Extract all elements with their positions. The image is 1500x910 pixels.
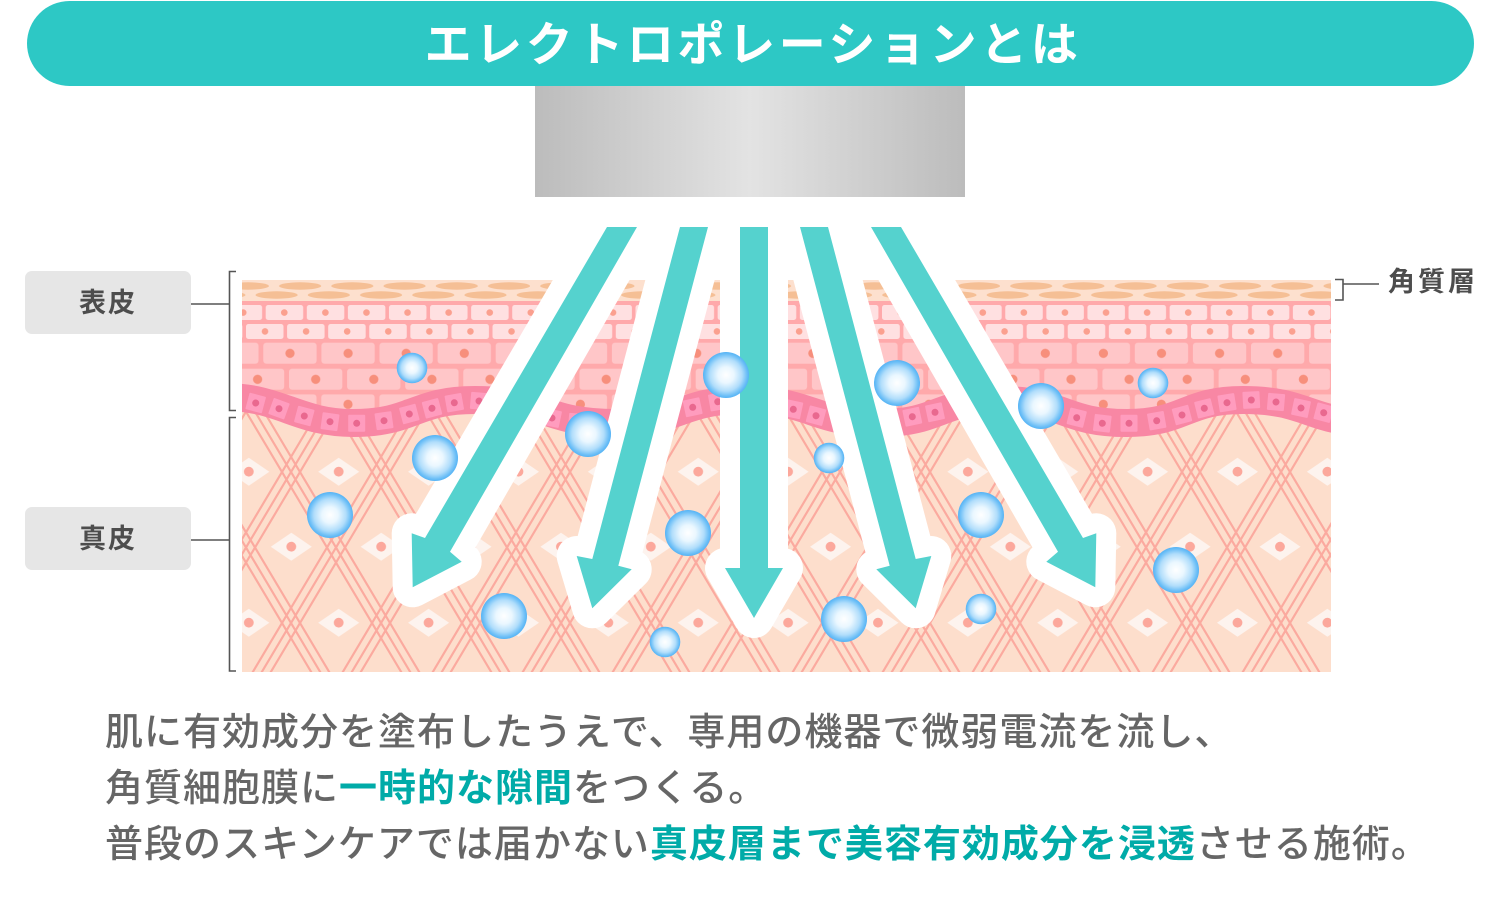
dermis (242, 412, 1331, 672)
epidermis cells (242, 301, 1331, 409)
arrow 4 (800, 227, 931, 608)
description text (105, 712, 1430, 866)
description text: 角質細胞膜に一時的な隙間をつくる。 (105, 768, 767, 810)
label: stratum corneum: 角質層 (1388, 267, 1478, 297)
label: dermis (25, 507, 191, 570)
arrow 5 (871, 227, 1096, 587)
arrow 3 (725, 227, 783, 618)
description text: 肌に有効成分を塗布したうえで、専用の機器で微弱電流を流し、 (105, 712, 1233, 754)
basal layer wave (225, 391, 1375, 433)
epidermis bracket and leader (191, 272, 236, 410)
label: epidermis: 表皮 (79, 288, 137, 318)
device head (535, 86, 965, 197)
title text: エレクトロポレーションとは (425, 18, 1081, 71)
description text: 普段のスキンケアでは届かない真皮層まで美容有効成分を浸透させる施術。 (105, 824, 1430, 866)
arrow 2 (577, 227, 708, 608)
skin layers (225, 280, 1375, 672)
arrows (412, 227, 1096, 618)
stratum corneum (242, 282, 1331, 299)
title banner (27, 1, 1474, 86)
active ingredient bubbles (307, 352, 1199, 657)
arrow 1 (412, 227, 637, 587)
stratum corneum bracket and leader (1335, 280, 1379, 300)
label: dermis: 真皮 (79, 524, 137, 554)
dermis bracket and leader (191, 418, 236, 671)
label: epidermis (25, 271, 191, 334)
arrow fills (412, 227, 1096, 618)
skin diagram (191, 227, 1379, 672)
